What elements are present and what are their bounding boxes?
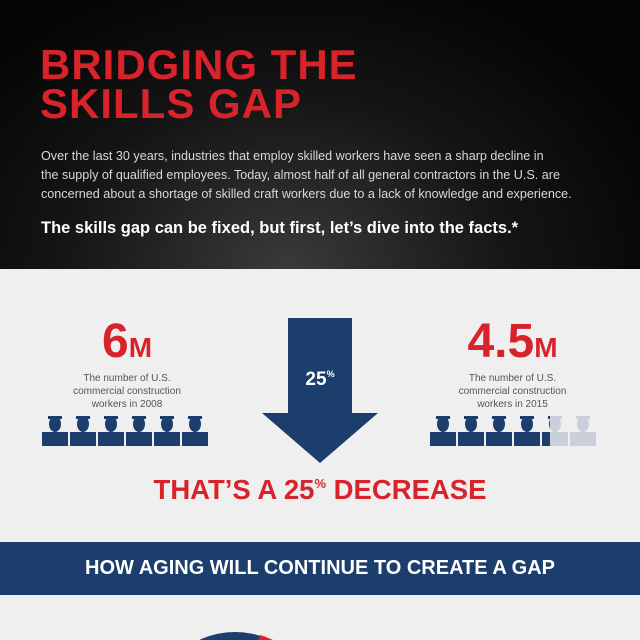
stat: 4.5M: The number of U.S.: [469, 373, 556, 384]
arrow: 25% decrease: 25: [305, 369, 327, 390]
arrow: 25% decrease: %: [327, 369, 335, 379]
title: SKILLS GAP: [40, 80, 302, 127]
stat: 4.5M: [459, 315, 566, 410]
icon: six workers: [42, 416, 208, 446]
stat: 6M: The number of U.S.: [83, 373, 171, 384]
bold statement: The skills gap can be fixed, but first, let’s dive into the facts.*: [41, 219, 518, 237]
icon: workers reduced: [430, 416, 596, 446]
stat: 6M: commercial construction: [73, 386, 181, 397]
title: [40, 41, 358, 127]
arrow: 25% decrease: [262, 318, 378, 463]
chart: donut (partial): [199, 632, 273, 640]
stat: 6M: workers in 2008: [92, 399, 162, 410]
banner: aging section: [0, 542, 640, 595]
stat: 4.5M: workers in 2015: [477, 399, 548, 410]
panel: dark header: [0, 0, 640, 269]
intro text: Over the last 30 years, industries that employ skilled workers have seen a sharp decline in: [41, 149, 544, 163]
intro text: concerned about a shortage of skilled craft workers due to a lack of knowledge and experience.: [41, 187, 572, 201]
stat: 4.5M: 4.5M: [467, 315, 558, 368]
stat: 4.5M: commercial construction: [459, 386, 566, 397]
stat: 6M: [73, 315, 181, 410]
stat: 6M: 6M: [102, 315, 152, 368]
banner: aging section: HOW AGING WILL CONTINUE TO CREATE A GAP: [85, 557, 555, 579]
title: BRIDGING THE: [40, 41, 358, 88]
intro text: [41, 149, 572, 201]
heading: 25% decrease: THAT’S A 25% DECREASE: [154, 474, 486, 505]
intro text: the supply of qualified employees. Today, almost half of all general contractors in the U.S. are: [41, 168, 560, 182]
